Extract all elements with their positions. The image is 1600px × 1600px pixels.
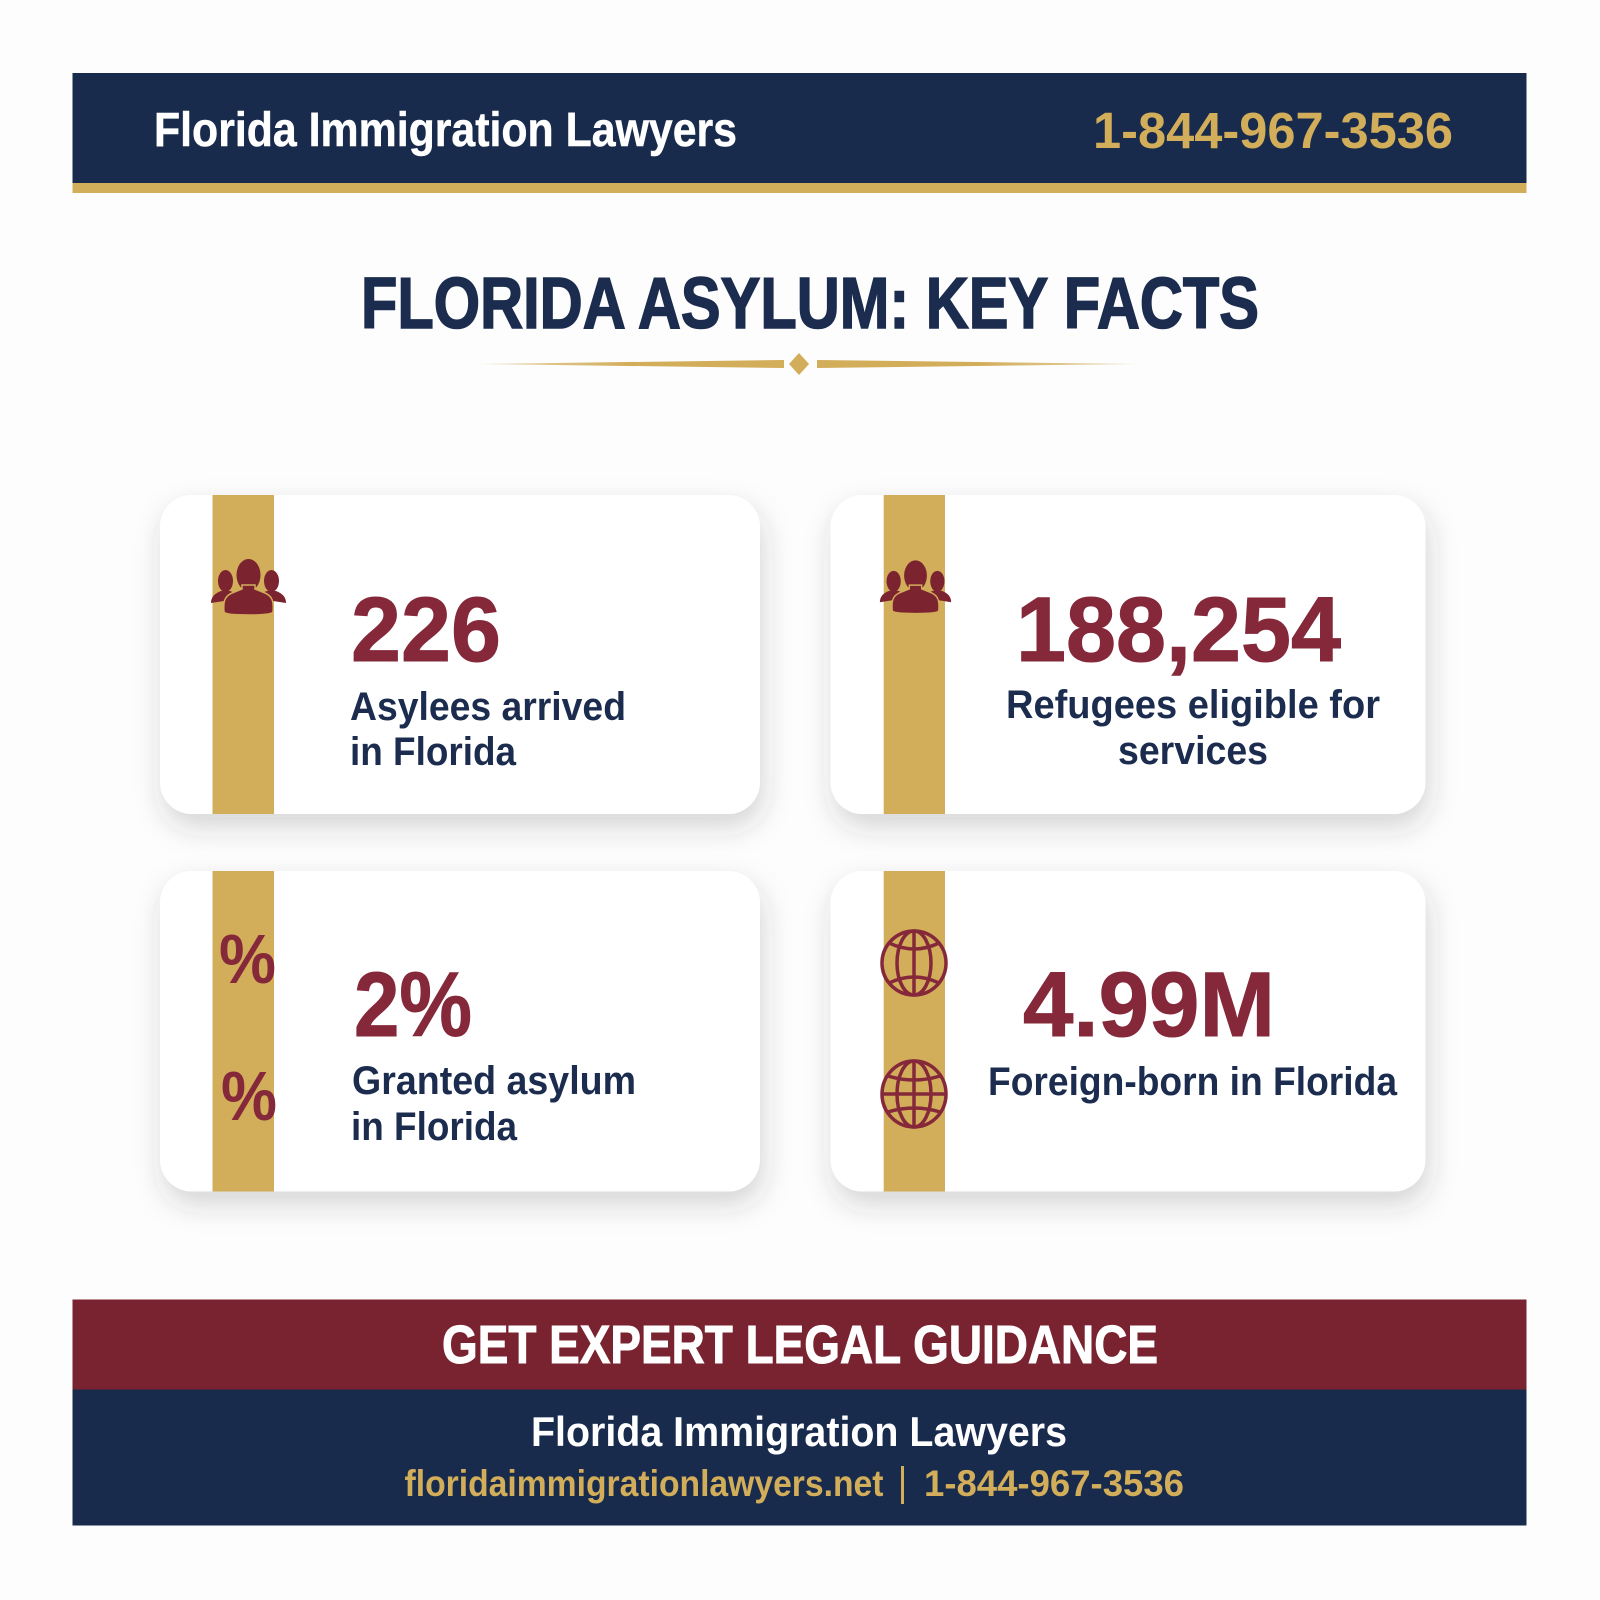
- caption: [350, 685, 626, 774]
- website and phone: 1-844-967-3536: [924, 1463, 1184, 1504]
- panel: asylees card: [160, 495, 760, 814]
- cta heading: GET EXPERT LEGAL GUIDANCE: [442, 1315, 1158, 1375]
- caption: in Florida: [351, 1105, 518, 1149]
- stat: 188,254: 188,254: [1016, 579, 1341, 681]
- caption: [351, 1059, 636, 1149]
- gold strip: [212, 871, 274, 1192]
- phone number: 1-844-967-3536: [1093, 102, 1453, 159]
- firm name: Florida Immigration Lawyers: [531, 1408, 1067, 1455]
- caption: services: [1118, 729, 1268, 773]
- stat: 2%: 2%: [354, 954, 472, 1056]
- caption: in Florida: [350, 730, 517, 774]
- panel: foreign-born card: [830, 871, 1426, 1192]
- panel: refugees card: [830, 495, 1426, 814]
- stat: 4.99M: 4.99M: [1023, 954, 1275, 1056]
- icon: globe: [882, 1061, 946, 1127]
- gold strip: [884, 495, 945, 814]
- icon: globe: [882, 931, 946, 995]
- title divider with diamond: [477, 353, 1139, 375]
- caption: [1006, 683, 1380, 773]
- caption: Asylees arrived: [350, 685, 626, 729]
- title: FLORIDA ASYLUM: KEY FACTS: [361, 264, 1259, 344]
- gold strip: [884, 871, 945, 1192]
- website and phone: floridaimmigrationlawyers.net: [404, 1463, 884, 1504]
- icon: people group: [880, 560, 951, 614]
- footer contact panel: [72, 1390, 1526, 1526]
- panel: granted asylum card: [160, 871, 760, 1192]
- icon: percent signs: %: [221, 1057, 277, 1135]
- caption: Refugees eligible for: [1006, 683, 1380, 727]
- footer banner: call to action: [72, 1300, 1526, 1390]
- icon: percent signs: [219, 920, 277, 1135]
- caption: Granted asylum: [352, 1059, 636, 1103]
- icon: percent signs: %: [219, 920, 276, 998]
- icon: people group: [211, 559, 286, 615]
- gold strip: [212, 495, 274, 814]
- header bar: [72, 73, 1526, 193]
- caption: Foreign-born in Florida: [988, 1060, 1398, 1104]
- firm name: Florida Immigration Lawyers: [154, 104, 737, 157]
- website and phone: [404, 1463, 1184, 1504]
- stat: 226: 226: [351, 579, 501, 681]
